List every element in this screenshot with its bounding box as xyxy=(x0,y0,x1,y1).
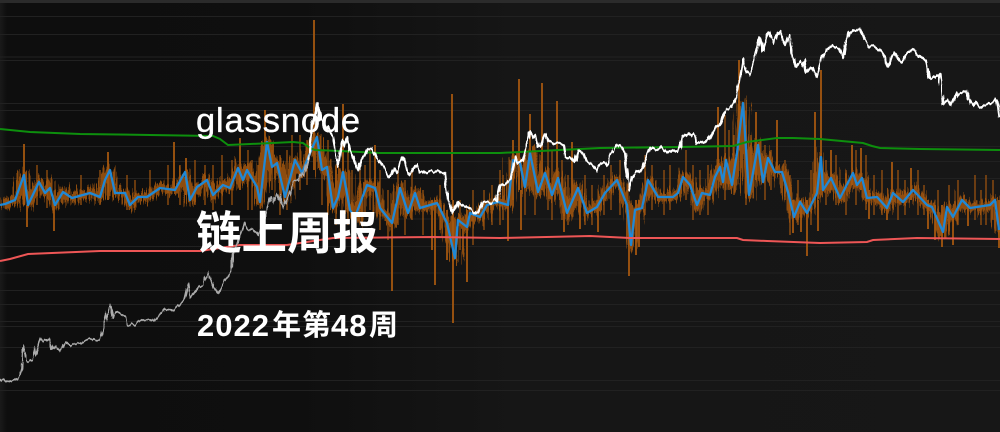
blue smoothed line xyxy=(0,103,999,258)
green line xyxy=(0,129,1000,153)
logo: glassnode: glassnode xyxy=(196,102,361,140)
subtitle: week: 年 xyxy=(272,310,301,342)
subtitle: week: 2022 xyxy=(197,308,270,343)
subtitle: week: 第 xyxy=(302,310,331,342)
red line xyxy=(0,236,1000,261)
subtitle: week: 48 xyxy=(331,308,367,343)
orange volatility band and spikes xyxy=(0,20,999,323)
subtitle: week xyxy=(197,308,398,343)
subtitle: week: 周 xyxy=(369,310,398,342)
title: 链上周报 xyxy=(196,208,378,259)
